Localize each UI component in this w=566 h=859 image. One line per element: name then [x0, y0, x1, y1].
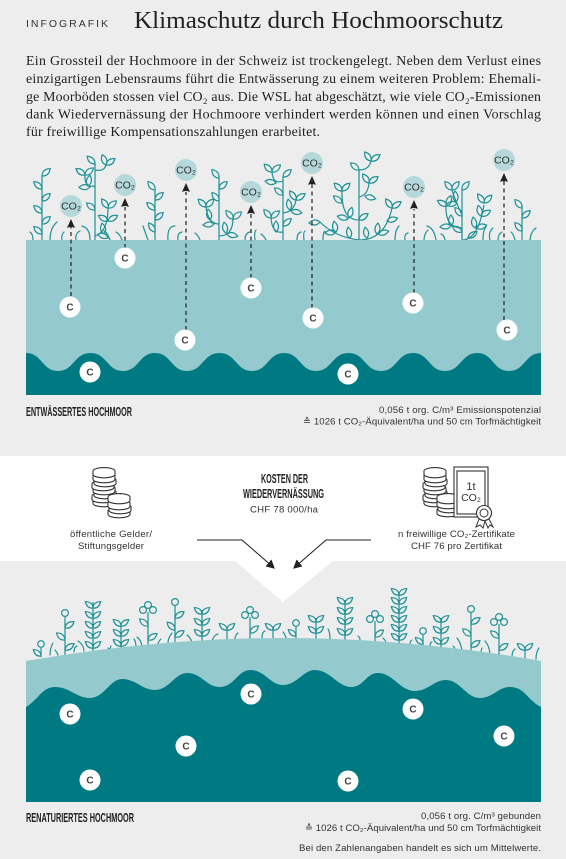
certificate text	[398, 529, 515, 552]
intro text: für freiwillige Kompensationszahlungen erarbeitet.	[26, 125, 320, 140]
flower	[55, 610, 75, 655]
small flower	[32, 641, 44, 658]
flower	[165, 599, 185, 642]
caption: restored bog values: ≙ 1026 t CO₂-Äquivalent/ha und 50 cm Torfmächtigkeit	[305, 822, 541, 834]
arrows: carbon rising as CO2	[71, 181, 504, 330]
certificate text: CHF 76 pro Zertifikat	[411, 541, 502, 552]
intro text: ge Moorböden stossen viel CO₂ aus. Die WSL hat abgeschätzt, wie viele CO₂-Emissionen	[26, 90, 541, 105]
grass upper	[30, 222, 536, 240]
icon: coin stacks	[92, 468, 131, 518]
cost heading	[243, 472, 324, 516]
grass lower	[50, 629, 539, 659]
arrow: right to centre	[294, 540, 371, 568]
cost heading: CHF 78 000/ha	[250, 504, 319, 516]
plant H	[513, 198, 532, 240]
panel: restored bog soil	[26, 638, 541, 802]
icon: coins and certificate: CO₂	[461, 492, 481, 504]
panel: drained bog soil	[26, 240, 541, 395]
dark wet peat	[26, 670, 541, 802]
wheat	[193, 606, 211, 642]
sprout	[264, 622, 282, 638]
flower	[461, 606, 481, 651]
light peat mound	[26, 638, 541, 802]
cost heading: KOSTEN DER	[261, 472, 308, 486]
wavy dark water layer	[26, 353, 541, 395]
wheat	[336, 596, 354, 640]
triple flower	[367, 611, 385, 642]
small flower	[287, 620, 299, 638]
footnote: Bei den Zahlenangaben handelt es sich um Mittelwerte.	[299, 843, 541, 854]
small flower	[414, 628, 426, 646]
CO2 bubbles	[60, 149, 515, 217]
header label: Infografik: INFOGRAFIK	[26, 18, 108, 30]
certificate text: n freiwillige CO₂-Zertifikate	[398, 529, 515, 540]
wheat	[84, 600, 102, 651]
sprout	[516, 642, 534, 658]
funding text	[70, 529, 152, 552]
plants: drained bog	[30, 151, 536, 240]
carbon circles lower	[60, 684, 514, 792]
wheat	[432, 614, 450, 648]
cost heading: WIEDERVERNÄSSUNG	[243, 486, 324, 501]
caption: restored bog values: 0,056 t org. C/m³ gebunden	[421, 811, 541, 822]
carbon circles upper	[60, 248, 518, 384]
caption: drained bog values: 0,056 t org. C/m³ Emissionspotenzial	[379, 405, 541, 416]
arrow: left to centre	[197, 540, 274, 568]
arrowheads	[67, 173, 508, 228]
intro text: einzigartigen Lebensraums führt die Entwässerung zu einem weiteren Problem: Ehemali-	[26, 72, 541, 87]
plant E	[262, 162, 306, 240]
upper light peat layer	[26, 240, 541, 395]
caption: drained bog values	[303, 405, 541, 428]
caption: restored bog values	[305, 811, 541, 834]
sprout	[218, 622, 236, 640]
label: restored bog: RENATURIERTES HOCHMOOR	[26, 811, 134, 825]
tall wheat	[390, 587, 408, 643]
panel: cost band	[0, 456, 566, 602]
plant G	[436, 180, 494, 240]
icon: coins and certificate: 1t	[466, 481, 476, 493]
plant D	[196, 168, 243, 240]
plant A	[32, 167, 52, 240]
intro text: Ein Grossteil der Hochmoore in der Schweiz ist trockengelegt. Neben dem Verlust eines	[26, 54, 541, 69]
funding text: Stiftungsgelder	[78, 541, 145, 552]
plant F	[309, 151, 402, 240]
wheat	[112, 618, 130, 649]
caption: drained bog values: ≙ 1026 t CO₂-Äquivalent/ha und 50 cm Torfmächtigkeit	[303, 416, 541, 428]
title: Klimaschutz durch Hochmoorschutz	[134, 8, 503, 34]
intro text	[26, 54, 541, 140]
intro text: dank Wiedervernässung der Hochmoore verhindert werden können und einen Vorschlag	[26, 108, 541, 122]
wheat	[307, 614, 325, 639]
label: drained bog: ENTWÄSSERTES HOCHMOOR	[26, 404, 132, 419]
triple flower	[242, 607, 260, 640]
plant B	[75, 154, 119, 240]
funding text: öffentliche Gelder/	[70, 529, 152, 540]
plant C	[145, 180, 165, 240]
icon: coins and certificate	[423, 467, 493, 528]
triple flower	[138, 602, 158, 645]
plants: restored bog	[32, 587, 539, 659]
triple flower	[489, 614, 509, 655]
